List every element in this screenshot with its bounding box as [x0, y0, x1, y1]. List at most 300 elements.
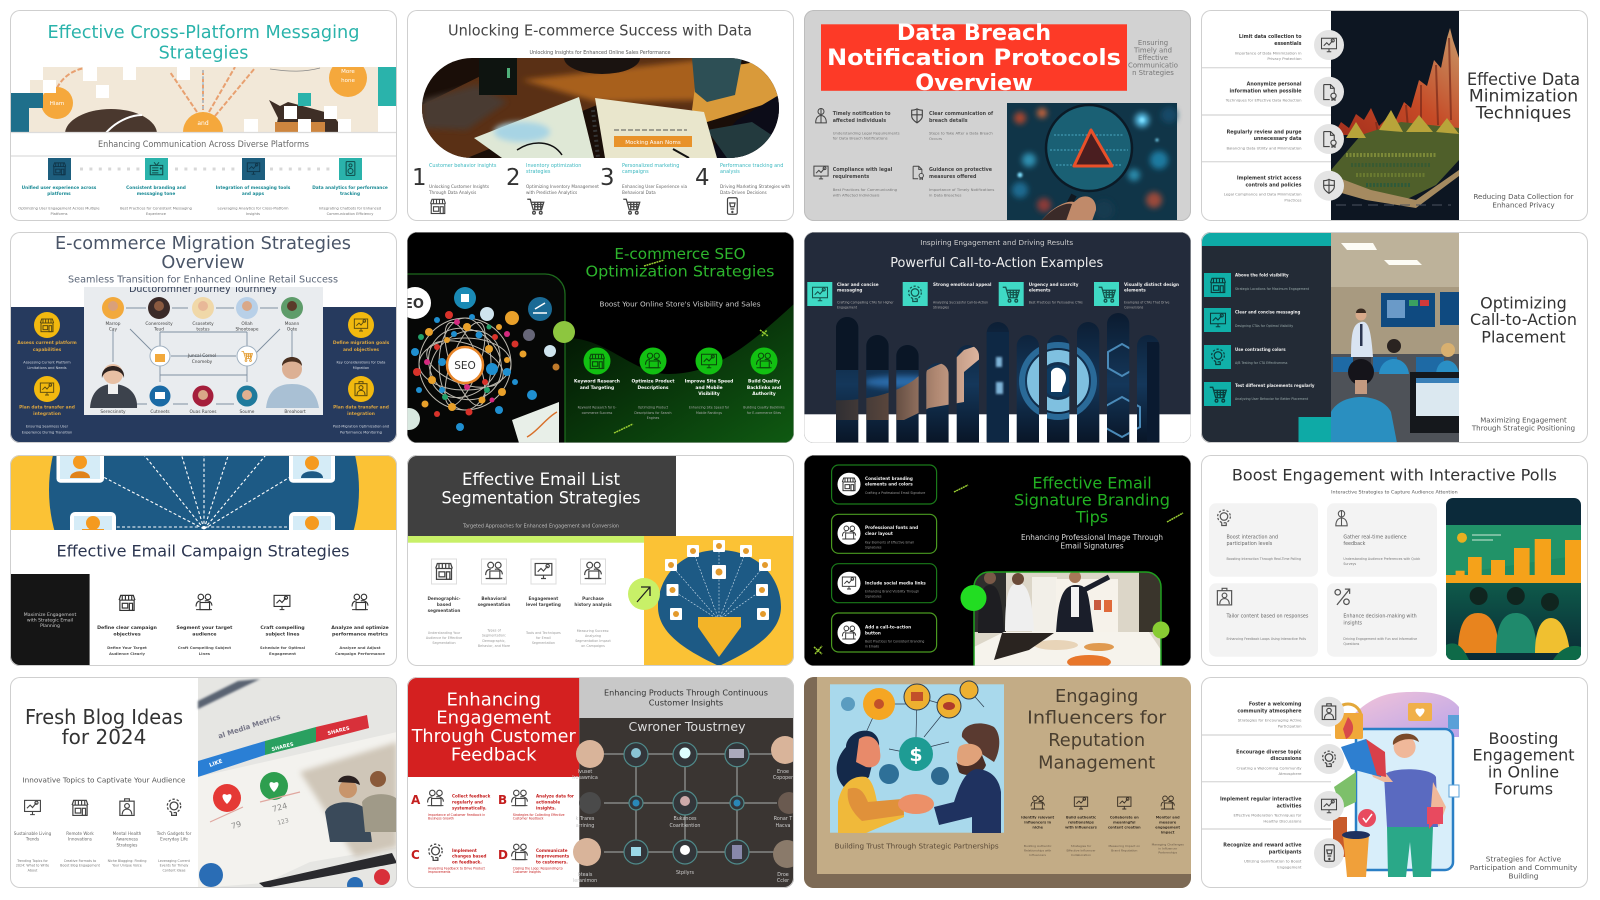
feedback labels: Analyze data for [536, 794, 574, 799]
teal icons [1204, 273, 1231, 406]
subtitle: Timely and [1133, 47, 1172, 55]
panel: e-commerce SEO slide [398, 232, 794, 445]
strategy descriptions: Enhancing Site Speed for [689, 406, 730, 410]
item labels: Customer behavior insights [429, 163, 497, 169]
tactic labels: engagement [1155, 826, 1180, 830]
title: Powerful Call-to-Action Examples [890, 256, 1103, 271]
tactic labels: influencers in [1024, 821, 1052, 825]
customer journey diagram: Cnomeby [192, 359, 213, 365]
subtitle: Participation and Community [1470, 863, 1578, 872]
segment labels: Purchase [582, 596, 604, 601]
numbers: 4 [695, 165, 710, 191]
numbers: 1 [412, 165, 427, 191]
pill photo of notebook on desk [422, 58, 779, 158]
item descriptions: Legal Compliance and Data Minimization [1224, 191, 1302, 196]
panel: email list segmentation slide [407, 455, 794, 666]
title banner: Data Breach [897, 20, 1051, 46]
teal accents [1201, 232, 1331, 443]
point labels: tracking [340, 191, 360, 197]
customer journey diagram: Breahoort [284, 409, 306, 415]
item labels: Inventory optimization [526, 163, 581, 169]
subtitle: Enhancing Communication Across Diverse Platforms [98, 139, 309, 149]
tactic descriptions: Relationships with [1024, 848, 1051, 852]
feature cards: Enhancing Brand Visibility Through [865, 589, 919, 593]
tactic labels: Identify relevant [1021, 816, 1055, 820]
item descriptions: Unlocking Customer Insights [429, 184, 489, 189]
topic labels: Strategies [117, 843, 137, 848]
point descriptions: Best Practices for Consistent Messaging [120, 206, 192, 210]
customer journey photo: Ieranimon [573, 878, 597, 884]
segment descriptions: on Campaigns [581, 644, 605, 648]
panel: customer feedback slide [407, 677, 801, 888]
example labels: Visually distinct design [1124, 282, 1179, 287]
panel: call-to-action placement slide [1201, 232, 1588, 443]
item descriptions: Atmosphere [1278, 771, 1302, 776]
card text: insights [1343, 620, 1363, 626]
feature cards: Best Practices for Consistent Branding [865, 639, 924, 643]
item descriptions: Creating a Welcoming Community [1237, 765, 1302, 770]
strategy details: Audience Clearly [109, 651, 146, 656]
customer journey diagram: Cutneets [150, 409, 170, 415]
segment descriptions: Measuring Success: [577, 629, 609, 633]
arrow badge [628, 578, 660, 610]
feature cards: elements and colors [865, 482, 913, 487]
photo: magnifier over warning triangle [1007, 103, 1177, 221]
item descriptions: Driving Marketing Strategies with [720, 184, 791, 189]
item labels: essentials [1274, 41, 1302, 47]
customer journey diagram: Coneroresity [145, 321, 173, 327]
feedback labels: insights. [536, 805, 556, 810]
icon circles [1314, 30, 1344, 201]
strategy details [107, 645, 385, 656]
customer journey photo: Ivuset [578, 769, 592, 775]
card descriptions: Enhancing Feedback Loops Using Interactive Polls [1226, 637, 1306, 641]
title [25, 705, 183, 749]
segment descriptions: Segmentation [532, 641, 555, 645]
item descriptions: Participation [1278, 724, 1302, 729]
feature cards: Key Elements of Effective Email [865, 540, 914, 544]
customer journey diagram: Ollah [241, 321, 253, 327]
point descriptions: Insights [246, 212, 260, 216]
item labels: Implement strict access [1237, 176, 1302, 182]
topic labels: Trends [25, 837, 39, 842]
title [1467, 70, 1580, 124]
item descriptions: Utilizing Gamification to Boost [1244, 859, 1302, 864]
item labels [429, 163, 783, 175]
strategy descriptions: Keyword Research for E- [578, 406, 616, 410]
item descriptions: Privacy Protection [1267, 56, 1302, 61]
subtitle: Strategies for Active [1486, 855, 1562, 864]
topic descriptions: Trending Topics for [16, 859, 49, 863]
topic icons [25, 799, 181, 815]
feedback labels: to customers. [536, 859, 568, 864]
banner illustration: More [341, 69, 355, 75]
feedback descriptions: Strategies for Collecting Effective [513, 813, 565, 817]
strategy labels: objectives [113, 632, 141, 638]
feedback descriptions: Closing the Loop: Responding to [513, 866, 563, 870]
item descriptions: Practices [1284, 197, 1302, 202]
point descriptions: Leveraging Analytics for Cross-Platform [218, 206, 289, 210]
customer journey photo: arrining [576, 823, 594, 829]
point icons [814, 108, 923, 179]
step descriptions: Experience During Transition [22, 431, 72, 435]
title: Overview [161, 253, 245, 273]
topic descriptions: Leveraging Current [158, 859, 191, 863]
item labels: Implement regular interactive [1220, 797, 1302, 803]
item descriptions: Strategies for Encouraging Active [1238, 718, 1302, 723]
black tagline box: with Strategic Email [27, 618, 73, 624]
segment descriptions: Tools and Techniques [525, 631, 561, 635]
segment descriptions: Audience for Effective [426, 636, 462, 640]
point labels: breach details [929, 118, 968, 124]
example descriptions [837, 301, 1169, 310]
title: Effective Email Campaign Strategies [56, 542, 350, 561]
point descriptions: Communication Efficiency [327, 212, 374, 216]
letter markers: D [498, 848, 508, 862]
item labels: Personalized marketing [622, 163, 679, 169]
customer journey photo: Cwroner Toustrney [628, 719, 746, 734]
title: for 2024 [62, 725, 146, 749]
subtitle: Interactive Strategies to Capture Audience Attention [1331, 489, 1458, 495]
title: Management [1038, 753, 1155, 774]
strategy details: Lines [199, 651, 211, 656]
customer journey photo: Stpilyrs [676, 870, 694, 876]
title [1027, 686, 1167, 774]
title: Minimization [1469, 87, 1578, 107]
item labels: Anonymize personal [1247, 82, 1302, 88]
customer journey photo: Coaritiention [670, 823, 700, 829]
tactic descriptions: Brand Reputation [1111, 848, 1138, 852]
title: Boosting [1489, 729, 1558, 748]
segment descriptions: Types of [486, 629, 502, 633]
segment labels: segmentation [428, 608, 460, 613]
title: Engagement [1472, 746, 1574, 765]
subtitle: Maximizing Engagement [1480, 416, 1567, 424]
numbers: 3 [600, 165, 615, 191]
letter markers: B [498, 793, 507, 807]
photo: call centre [1331, 232, 1459, 443]
subtitle: Enhancing Professional Image Through [1021, 533, 1163, 542]
pill photo of notebook on desk: Mocking Asan Noms [625, 140, 681, 146]
photo: social media metrics dashboard [198, 677, 397, 893]
customer journey photo: Irosawnica [572, 775, 598, 781]
photo: social media metrics dashboard: al Media Metrics [217, 713, 282, 741]
feedback labels: systematically. [452, 805, 487, 810]
placement descriptions: Analyzing User Behavior for Better Placement [1235, 397, 1309, 401]
subtitle [1471, 416, 1575, 433]
item descriptions: Through Data Analysis [428, 190, 476, 195]
point labels: Data analytics for performance [312, 185, 388, 191]
strategy descriptions: for E-commerce Sites [747, 411, 781, 415]
feature cards: Signatures [865, 595, 882, 599]
feature cards: Crafting a Professional Email Signature [865, 491, 925, 495]
card text: feedback [1343, 541, 1366, 547]
point descriptions: Integrating Chatbots for Enhanced [319, 206, 381, 210]
icon row [48, 158, 362, 180]
subtitle: Communicatio [1128, 62, 1178, 70]
letter markers: A [411, 793, 421, 807]
panel: cross-platform messaging slide [10, 10, 397, 221]
feedback descriptions: Improvements [428, 870, 451, 874]
banner illustration: and [197, 120, 209, 127]
feedback descriptions: Importance of Customer Feedback in [428, 813, 485, 817]
tactic labels: Monitor and [1156, 816, 1180, 820]
feedback descriptions: Customer Feedback [513, 816, 544, 820]
panel: e-commerce data slide [407, 10, 794, 221]
subtitle [1470, 855, 1578, 880]
grey subtitle band: Customer Insights [649, 697, 723, 707]
step descriptions: Migration [353, 366, 369, 370]
customer journey diagram: Ductoromner Journey Tournney [129, 284, 277, 295]
tactic descriptions: Influencers [1029, 853, 1046, 857]
subtitle: Building Trust Through Strategic Partnerships [835, 843, 999, 851]
feedback labels: on feedback. [452, 859, 482, 864]
placement labels: Above the fold visibility [1235, 272, 1289, 278]
item descriptions: with Predictive Analytics [526, 190, 577, 195]
black tagline box: Maximize Engagement [24, 612, 76, 618]
item labels: Encourage diverse topic [1236, 749, 1302, 755]
segment descriptions: Behavior, and More [478, 644, 510, 648]
strategy details: Engagement [269, 651, 296, 656]
strategy labels: Craft compelling [260, 625, 305, 631]
subtitle: Through Strategic Positioning [1471, 425, 1575, 433]
feedback labels: Collect feedback [452, 794, 491, 799]
item labels: unnecessary data [1254, 136, 1302, 142]
segment labels: Engagement [529, 596, 558, 601]
subtitle: Building [1509, 871, 1539, 880]
team photo [960, 571, 1170, 669]
segment descriptions: Segmentation Impact [575, 639, 612, 643]
example labels: Clear and concise [837, 282, 879, 287]
feedback labels: improvements [536, 854, 570, 859]
placement labels [1235, 272, 1315, 388]
segment descriptions: Demographic, [482, 639, 506, 643]
photo: social media metrics dashboard: 123 [277, 817, 290, 827]
step labels: capabilities [33, 347, 62, 353]
title banner [821, 23, 1127, 91]
point labels: Unified user experience across [22, 185, 97, 191]
tactic descriptions [1024, 842, 1184, 857]
point labels [22, 186, 388, 196]
segment descriptions: Analyzing [585, 634, 601, 638]
step descriptions [22, 361, 389, 435]
segment labels: level targeting [526, 602, 561, 607]
tactic labels: measure [1159, 821, 1177, 825]
strategy details: Campaign Performance [335, 651, 385, 656]
feature cards: Professional fonts and [865, 525, 918, 530]
point labels: and apps [242, 191, 265, 197]
customer journey diagram: Serecsinnty [100, 409, 126, 415]
placement descriptions: Designing CTAs for Optimal Visibility [1235, 324, 1293, 328]
item labels: Foster a welcoming [1249, 702, 1302, 708]
photo: social media metrics dashboard: 724 [271, 801, 288, 814]
customer journey diagram: Teud [153, 326, 164, 332]
feature cards: Signatures [865, 545, 882, 549]
strategy labels: Segment your target [176, 625, 233, 631]
title [1014, 473, 1170, 526]
step labels: integration [347, 411, 375, 417]
numbers [414, 168, 708, 186]
striped photo columns [829, 310, 1169, 445]
card descriptions [1226, 557, 1420, 646]
card text: Tailor content based on responses [1226, 614, 1309, 620]
feedback descriptions: Analyzing Feedback to Drive Product [428, 866, 486, 870]
black tagline box: Planning [40, 623, 60, 629]
item labels: Recognize and reward active [1223, 843, 1302, 849]
item icons [430, 198, 737, 214]
title: Strategies [159, 44, 248, 64]
topic labels: Sustainable Living [14, 831, 52, 836]
example descriptions: Best Practices for Persuasive CTAs [1029, 301, 1083, 305]
tactic labels: with influencers [1065, 826, 1097, 830]
step descriptions: Key Considerations for Data [337, 361, 385, 365]
segment labels: segmentation [478, 602, 510, 607]
card descriptions: Understanding Audience Preferences with Quick [1343, 557, 1420, 561]
item labels: participants [1269, 849, 1302, 855]
topic labels: Everyday Life [160, 837, 188, 842]
title: Effective Data [1467, 70, 1580, 90]
segment labels: Demographic- [427, 596, 461, 601]
tactic labels [1021, 816, 1180, 835]
item descriptions [1224, 50, 1302, 202]
item labels: strategies [526, 169, 551, 175]
numbers: 2 [506, 165, 521, 191]
title: Influencers for [1027, 708, 1167, 729]
topic labels: Tech Gadgets for [156, 831, 192, 836]
subtitle [1128, 39, 1178, 77]
strategy labels: and Mobile [695, 385, 723, 391]
customer journey diagram: Cay [109, 326, 118, 332]
strategy descriptions: commerce Success [582, 411, 613, 415]
title: Placement [1481, 327, 1566, 346]
subtitle: Innovative Topics to Captivate Your Audience [22, 775, 186, 784]
strategy labels [97, 625, 389, 638]
customer journey diagram: Juncal Cornel [187, 353, 216, 359]
strategy labels: Define clear campaign [97, 625, 158, 631]
feature cards: in Emails [865, 644, 879, 648]
item labels: information when possible [1230, 88, 1302, 94]
title: Signature Branding [1014, 491, 1170, 510]
tactic labels: meaningful [1113, 821, 1135, 825]
segment labels: history analysis [574, 602, 612, 607]
placement descriptions [1235, 287, 1310, 401]
banner illustration: Hiam [50, 101, 64, 107]
panel: influencers slide [804, 677, 1191, 888]
point labels: Integration of messaging tools [216, 185, 291, 191]
feedback labels [452, 794, 574, 864]
feature cards: button [865, 630, 881, 635]
topic descriptions: Boost Blog Engagement [60, 864, 101, 868]
tactic descriptions: Effective Influencer [1066, 848, 1096, 852]
card icons [1217, 510, 1350, 605]
example descriptions: Conversions [1124, 306, 1144, 310]
panel: fresh blog ideas slide [10, 677, 397, 893]
strategy icons [119, 594, 368, 610]
point labels: Clear communication of [929, 111, 994, 117]
strategy labels: Backlinks and [747, 385, 781, 391]
tactic descriptions: in Influencer [1158, 846, 1178, 850]
customer journey photo: Ronar T [774, 816, 792, 822]
panel: email signature slide [804, 455, 1191, 669]
cards [1209, 503, 1437, 657]
item labels: activities [1277, 803, 1302, 809]
point labels: Timely notification to [833, 111, 891, 117]
customer journey photo: k Trares [576, 816, 595, 822]
strategy labels: Visibility [698, 391, 720, 397]
customer journey photo: bteais [578, 872, 593, 878]
banner illustration [11, 67, 396, 132]
subtitle: Seamless Transition for Enhanced Online Retail Success [68, 275, 338, 286]
step descriptions: Ensuring Seamless User [26, 425, 69, 429]
left step icons [34, 312, 60, 402]
point descriptions: Occurs [929, 136, 942, 141]
feedback labels: regularly and [452, 799, 483, 804]
banner illustration: hone [341, 78, 355, 84]
funnel illustration [644, 536, 794, 666]
card text: Gather real-time audience [1343, 534, 1407, 540]
strategy labels: performance metrics [332, 632, 388, 638]
example labels: Strong emotional appeal [933, 282, 992, 287]
customer journey photo: Copoper [773, 775, 793, 781]
segment descriptions: Understanding Your [428, 631, 461, 635]
point labels: Compliance with legal [833, 167, 893, 173]
feedback labels: actionable [536, 799, 560, 804]
red title block: Enhancing [447, 689, 541, 710]
red title block: Engagement [436, 708, 551, 729]
subtitle: Unlocking Insights for Enhanced Online Sales Performance [530, 50, 671, 56]
segment descriptions: for Email [536, 636, 551, 640]
item labels: analysis [720, 169, 740, 175]
strategy labels: subject lines [266, 632, 300, 638]
strategy labels: Analyze and optimize [331, 625, 389, 631]
title [56, 236, 350, 268]
point labels: requirements [833, 174, 869, 180]
example descriptions: Analyzing Successful Call-to-Action [933, 301, 988, 305]
item labels: controls and policies [1245, 182, 1302, 188]
title: Call-to-Action [1470, 310, 1577, 329]
subtitle: Ensuring [1138, 39, 1168, 47]
customer journey photo: Enoe [777, 769, 789, 775]
customer journey diagram [84, 284, 323, 415]
feedback descriptions: Customer Insights [513, 870, 541, 874]
point descriptions: for Data Breach Notifications [833, 136, 888, 140]
card text: participation levels [1226, 541, 1273, 547]
title: Effective Email [1032, 473, 1152, 492]
topic descriptions: About [28, 869, 38, 873]
subtitle [1473, 193, 1574, 209]
step labels: Assess current platform [17, 340, 77, 346]
strategy labels: audience [192, 632, 217, 638]
dark title block: Segmentation Strategies [442, 488, 640, 507]
step descriptions: Assessing Current Platform [23, 361, 71, 365]
strategy labels: Keyword Research [574, 379, 620, 385]
tactic descriptions: Measuring Impact on [1108, 844, 1140, 848]
segment icons [432, 559, 606, 584]
tactic labels: Collaborate on [1110, 816, 1139, 820]
point labels: messaging tone [137, 191, 175, 197]
strategy details: Analyze and Adjust [339, 645, 381, 650]
SEO network image: SEO [454, 360, 476, 372]
step labels: and objectives [343, 347, 379, 353]
tactic labels: content creation [1108, 826, 1141, 830]
customer journey diagram: Marrop [105, 321, 121, 327]
title: Tips [1075, 507, 1108, 526]
letter markers: C [411, 848, 420, 862]
red title block [407, 677, 579, 777]
item descriptions [1233, 718, 1302, 870]
point labels: affected individuals [833, 118, 886, 124]
segment labels: based [437, 602, 451, 607]
